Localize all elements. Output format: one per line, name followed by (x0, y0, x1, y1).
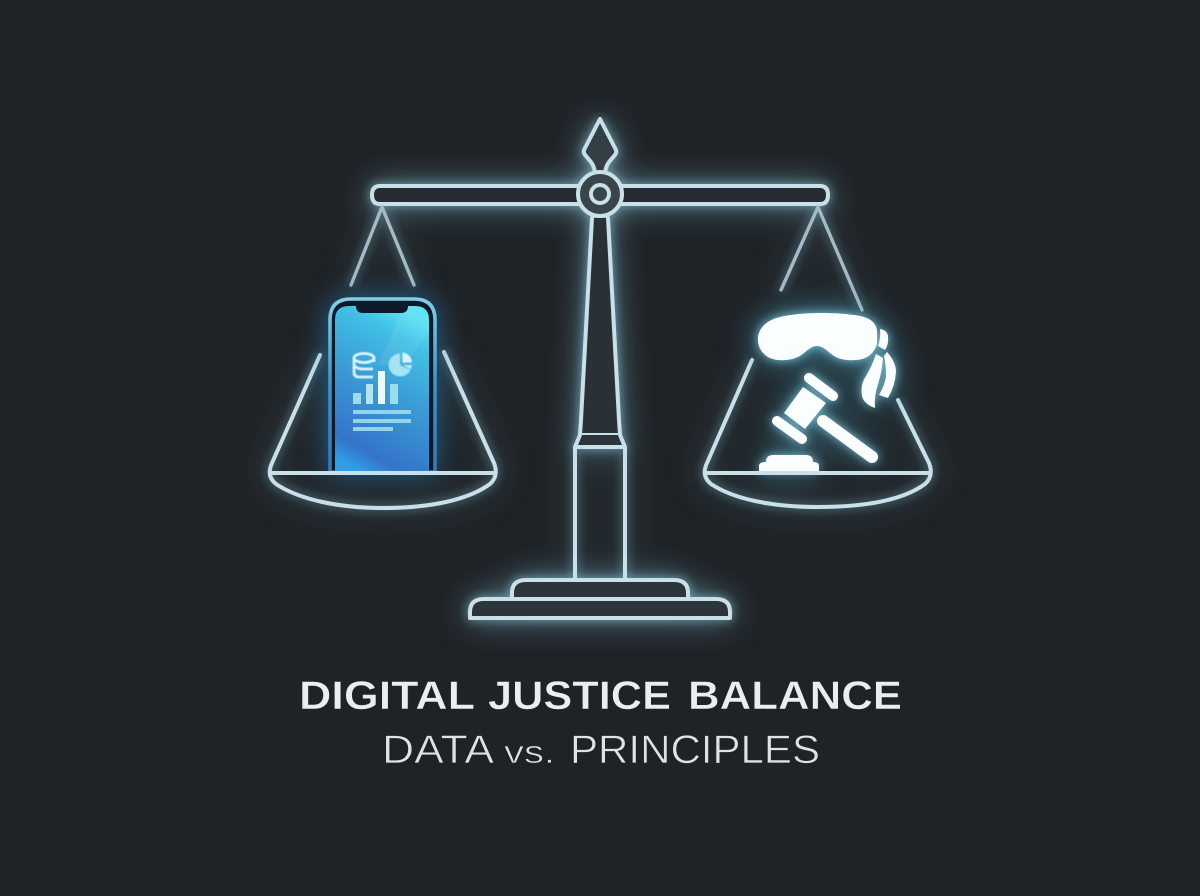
screen highlight (378, 306, 429, 365)
title (299, 674, 902, 718)
icon: blindfold (758, 313, 896, 408)
beam (372, 186, 828, 204)
gavel handle (823, 421, 872, 457)
subtitle: DATA (382, 728, 494, 772)
base upper tier (512, 580, 688, 599)
bar chart (353, 371, 398, 404)
scale frame (270, 119, 931, 618)
title: BALANCE (688, 674, 902, 718)
base lower tier (470, 599, 730, 618)
subtitle: vs. (504, 734, 555, 770)
icon: phone with data (271, 299, 495, 473)
column shaft (575, 447, 625, 580)
icon: database (354, 354, 374, 377)
icon: pie chart (389, 352, 412, 376)
right pan upper chains (781, 207, 862, 310)
phone body (330, 299, 435, 472)
gavel block (759, 455, 819, 471)
left pan upper chains (351, 207, 414, 285)
phone screen (335, 306, 429, 472)
gavel top cap (809, 378, 833, 396)
icon: blindfold and gavel (706, 313, 931, 473)
left pan bowl (270, 352, 496, 508)
gavel head (784, 387, 826, 429)
pivot hub (578, 172, 622, 216)
column (580, 218, 620, 435)
subtitle: PRINCIPLES (570, 728, 820, 772)
gavel bottom cap (777, 421, 802, 439)
icon: gavel (759, 378, 872, 471)
text lines (353, 410, 411, 431)
finial (584, 119, 616, 175)
right pan bowl (705, 360, 931, 507)
right pan rim (706, 471, 931, 475)
left pan rim (271, 471, 495, 475)
title: DIGITAL (299, 674, 475, 718)
column collar (575, 435, 625, 447)
title: JUSTICE (488, 674, 671, 718)
subtitle (382, 728, 820, 772)
